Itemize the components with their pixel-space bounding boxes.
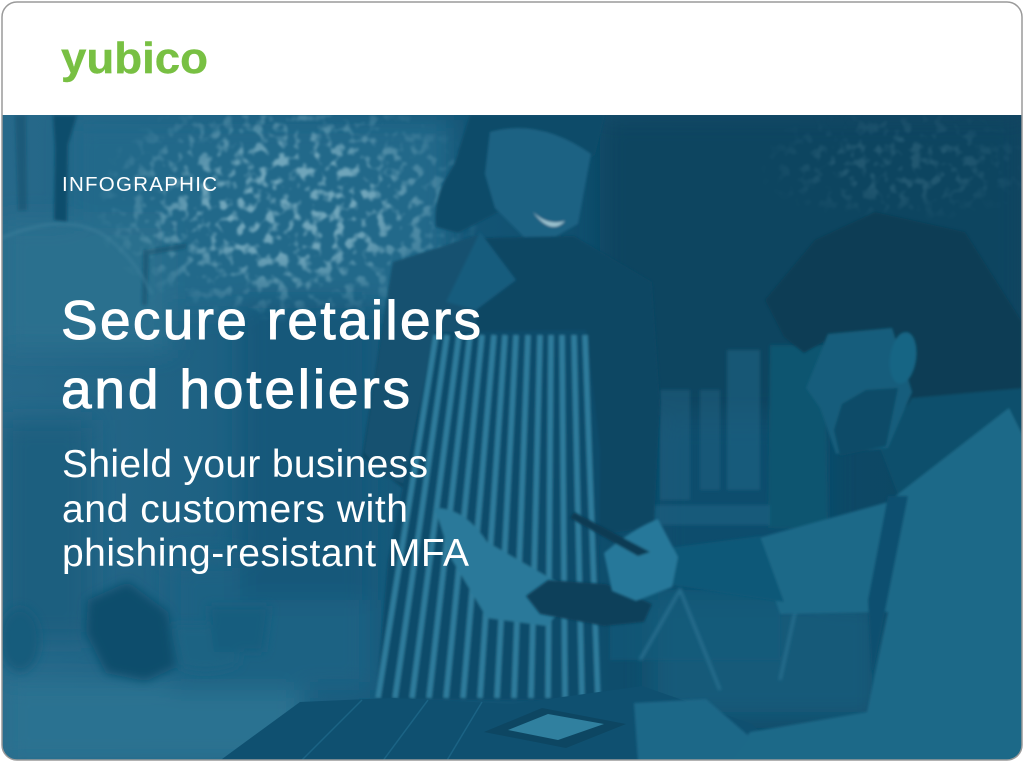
photo: male customer [570, 212, 1024, 762]
phone on table [484, 708, 626, 748]
shirt placket [868, 496, 908, 676]
subheading: phishing-resistant MFA [62, 532, 469, 575]
face [806, 328, 912, 454]
photo: plants and pots [0, 582, 270, 681]
shirt [729, 408, 1024, 762]
photo: background columns [610, 345, 828, 690]
photo: blurred garden background [7, 118, 879, 759]
subheading [62, 443, 469, 575]
heading [61, 289, 481, 420]
neck [883, 388, 1022, 490]
photo: tree trunks [15, 115, 188, 305]
photo: dark foliage top right [802, 122, 1002, 206]
forearm and hand [435, 508, 569, 626]
apron [376, 330, 600, 700]
subheading: Shield your business [62, 443, 428, 486]
lower hand [634, 699, 750, 762]
hair [435, 115, 605, 233]
beard [834, 388, 898, 456]
eyebrow: INFOGRAPHIC: INFOGRAPHIC [62, 173, 217, 196]
photo: woman server [362, 115, 660, 700]
photo: table [222, 692, 678, 760]
heading: Secure retailers [61, 289, 481, 351]
photo: pale arch [10, 222, 150, 290]
heading: and hoteliers [61, 358, 410, 420]
panel: header band [3, 3, 1021, 115]
face [485, 128, 591, 248]
photo: foliage highlights [104, 115, 474, 317]
logo: yubico: yubico [61, 34, 208, 83]
smile [533, 212, 565, 227]
hand holding phone [604, 519, 678, 601]
smartphone [570, 512, 650, 556]
forearm [674, 538, 783, 602]
shirt [362, 236, 660, 537]
subheading: and customers with [62, 488, 408, 531]
photo: payment terminal [526, 580, 652, 626]
hair [766, 213, 1021, 398]
ear [894, 331, 918, 380]
